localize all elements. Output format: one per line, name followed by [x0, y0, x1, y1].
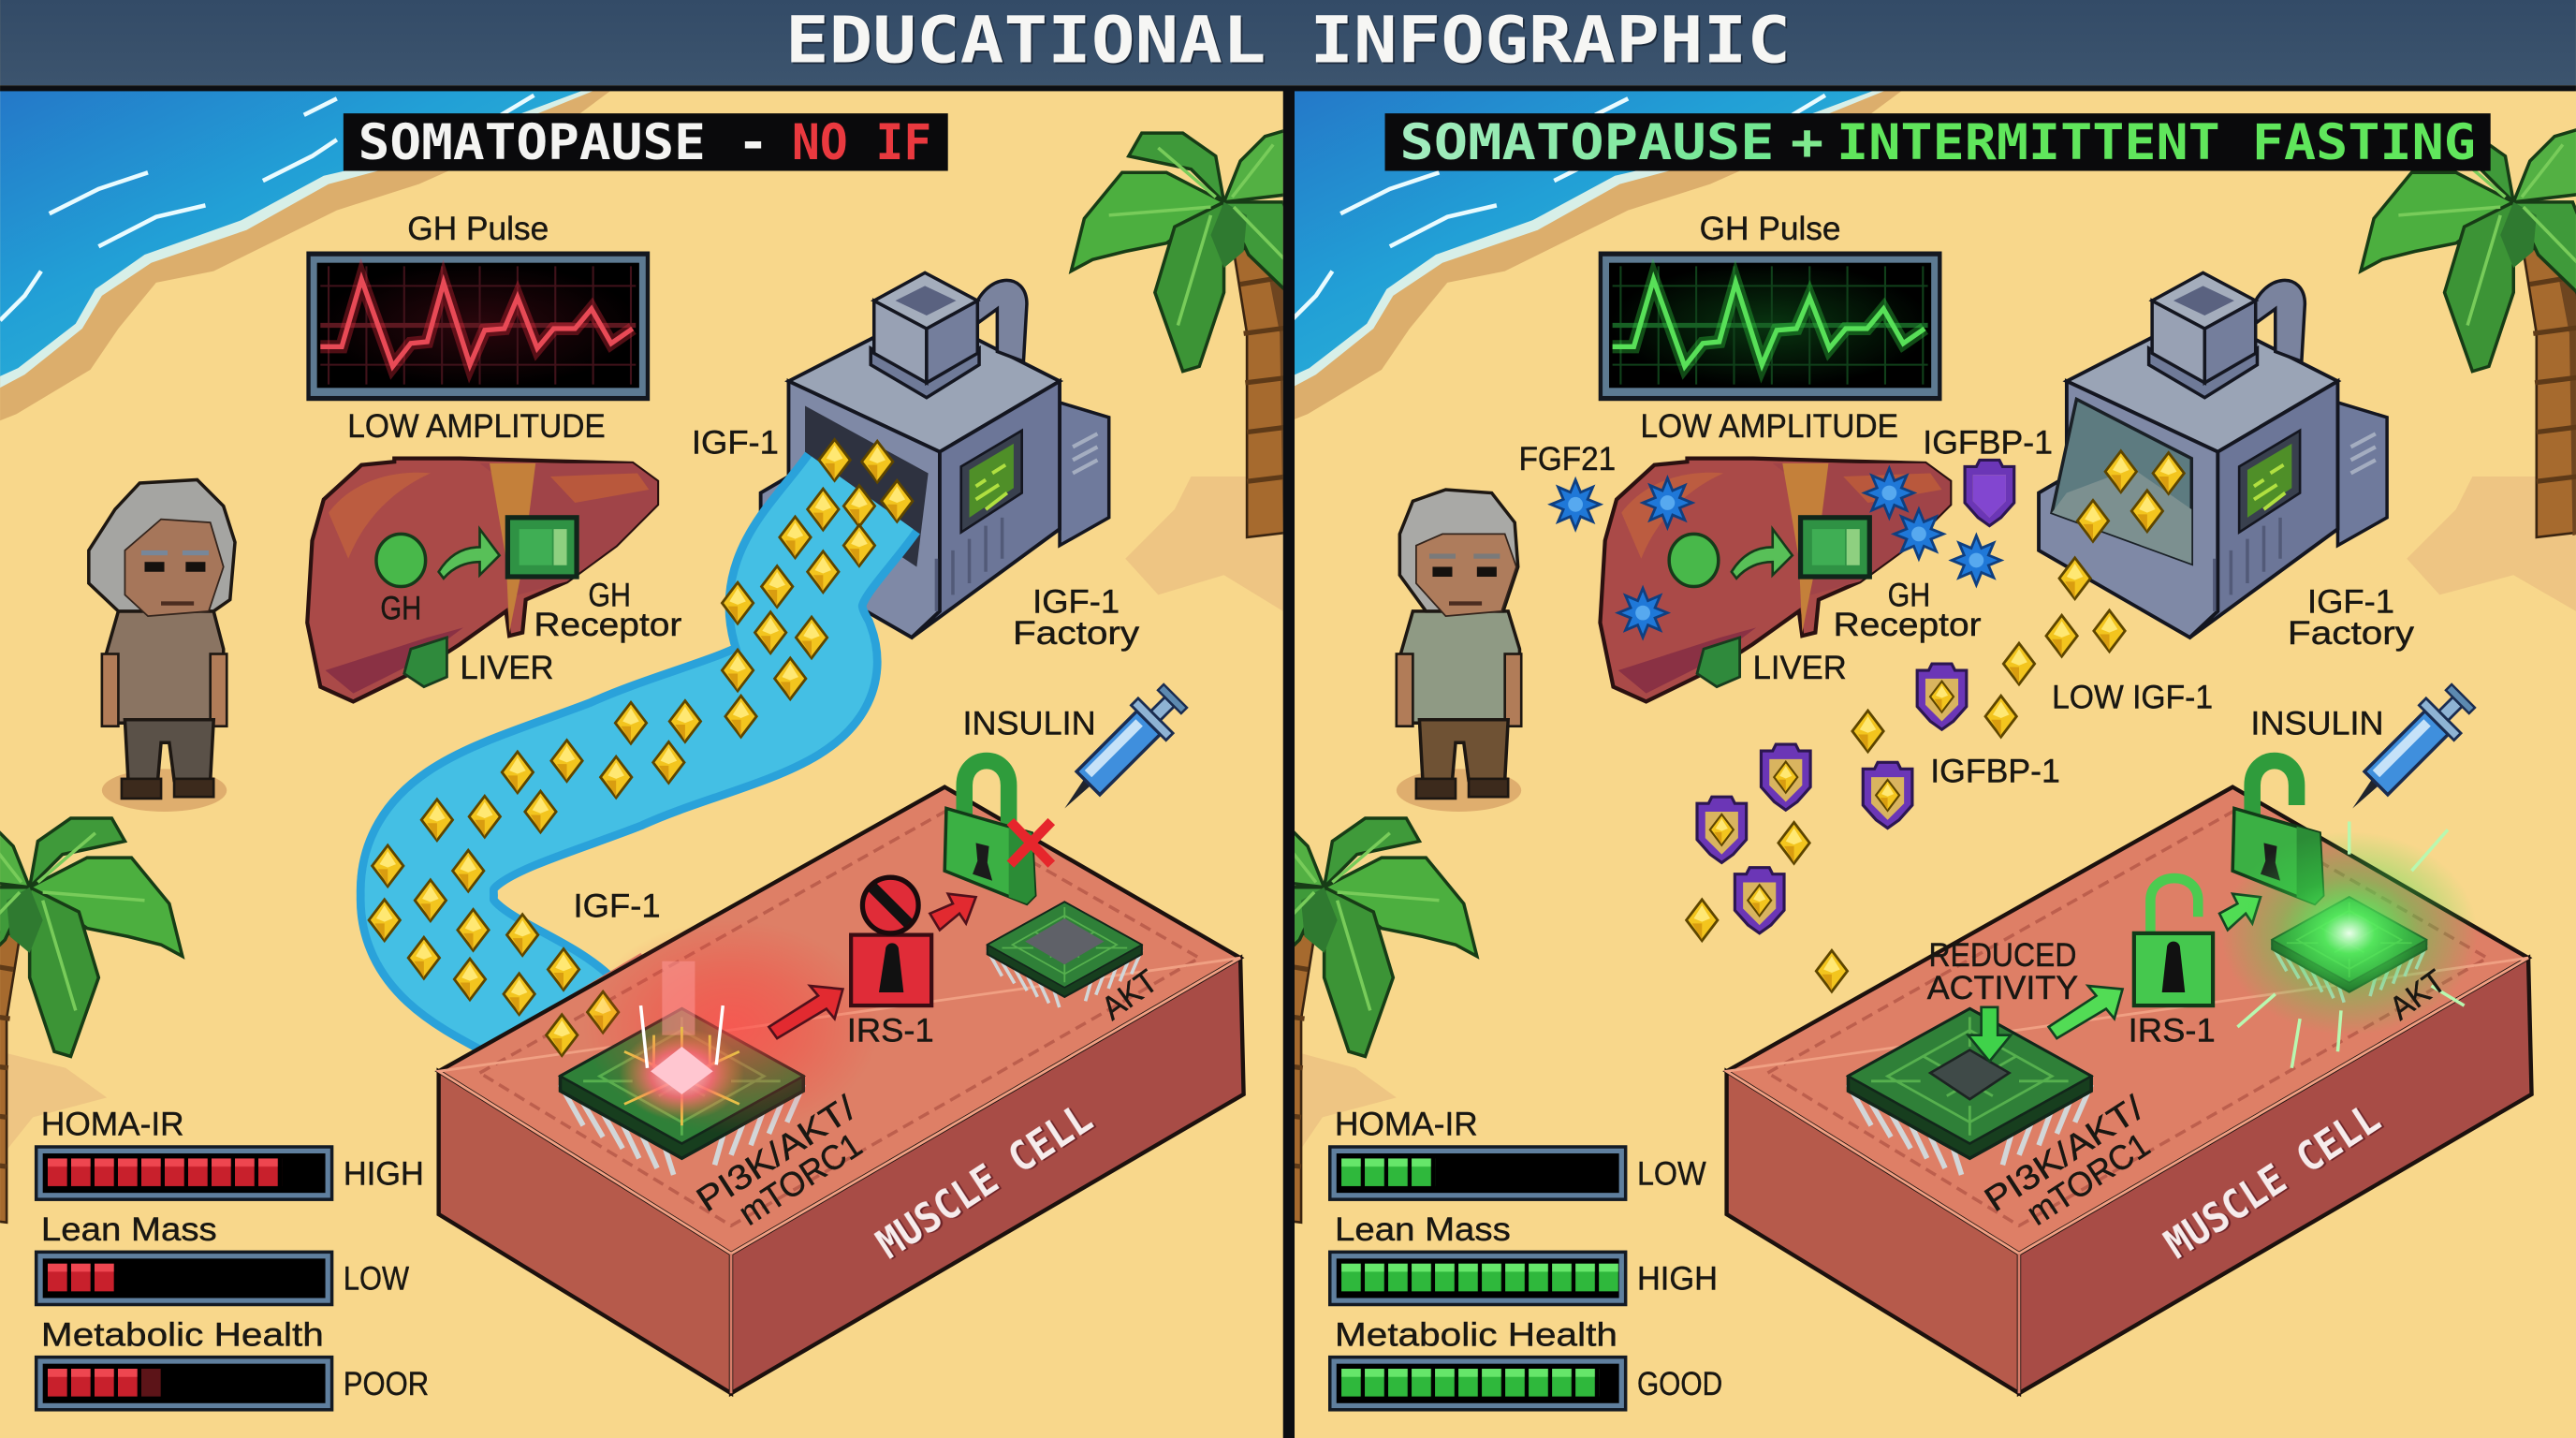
icon: open IRS-1 lock [2134, 878, 2213, 1005]
metric: HOMA-IR low: LOW [1637, 1155, 1706, 1192]
label: IGF-1 at factory: IGF-1 [692, 424, 779, 461]
arrow: reduced activity down [1969, 1007, 2011, 1062]
metric: Lean Mass low: LOW [344, 1261, 409, 1298]
IGF-1 diamonds inside factory [2077, 451, 2184, 541]
metric: Metabolic Health good: Metabolic Health [1335, 1316, 1617, 1353]
icon: IGF-1 factory [761, 272, 1109, 638]
person: older man [1397, 490, 1521, 812]
metric: HOMA-IR low [1328, 1107, 1706, 1201]
icon: blocked IRS-1 lock [851, 877, 931, 1005]
label: GH Receptor: Receptor [1834, 607, 1982, 643]
sparse IGF-1 particles [1687, 558, 2125, 991]
panel: Somatopause with intermittent fasting [1245, 91, 2576, 1412]
icon: liver [307, 459, 657, 701]
panel title: INTERMITTENT FASTING [1837, 114, 2476, 171]
label: Insulin: INSULIN [2250, 705, 2384, 741]
beach ocean [1292, 91, 1902, 420]
label: IRS-1: IRS-1 [847, 1013, 934, 1049]
metric: HOMA-IR high [35, 1107, 424, 1201]
label: IGF-1 Factory [2288, 584, 2415, 652]
label: Low amplitude: LOW AMPLITUDE [1640, 408, 1898, 445]
label: Reduced Activity: REDUCED [1928, 937, 2076, 974]
label: PI3K/AKT/mTORC1: mTORC1 [732, 1125, 869, 1233]
panel title: + [1791, 114, 1823, 171]
metric: Lean Mass low [35, 1211, 409, 1306]
label: IGFBP-1 bound: IGFBP-1 [1930, 753, 2060, 789]
label: IGF-1 Factory: Factory [1013, 615, 1140, 652]
icon: palm tree top right [2361, 128, 2576, 537]
metric: Metabolic Health poor: Metabolic Health [41, 1316, 324, 1353]
panel title [344, 113, 948, 171]
arrow: IRS-1 to lock [2219, 894, 2261, 930]
panel: Somatopause without intermittent fasting [0, 91, 1303, 1412]
AKT chip [988, 902, 1142, 1007]
icon: palm tree bottom left [1245, 814, 1477, 1223]
IGFBP-1 bound particles [1697, 664, 1967, 933]
metric: Metabolic Health poor: POOR [344, 1366, 429, 1402]
label: IGFBP-1: IGFBP-1 [1923, 424, 2053, 461]
metric: Metabolic Health poor [35, 1316, 429, 1412]
label: GH Pulse: GH Pulse [1700, 211, 1841, 247]
label: GH Receptor: GH [588, 578, 631, 614]
label: Liver: LIVER [1753, 650, 1847, 686]
arrow: IRS-1 to lock [929, 894, 976, 930]
panel title: SOMATOPAUSE - [359, 114, 768, 171]
icon: GH receptor [1801, 518, 1869, 577]
beach ocean [0, 91, 611, 420]
arrow: GH to receptor [439, 529, 500, 579]
icon: insulin syringe [1064, 679, 1193, 808]
metric: Lean Mass low: Lean Mass [41, 1211, 217, 1248]
label: AKT: AKT [2383, 962, 2452, 1027]
header band [0, 0, 2576, 91]
label: PI3K/AKT/mTORC1: PI3K/AKT/ [690, 1088, 863, 1219]
metric: Lean Mass high: Lean Mass [1335, 1211, 1511, 1248]
label: GH Receptor: Receptor [534, 607, 682, 643]
title: EDUCATIONAL INFOGRAPHIC [785, 4, 1791, 79]
label: FGF21: FGF21 [1519, 441, 1616, 477]
palm shadow [1125, 477, 1283, 611]
panel title [1385, 113, 2491, 171]
label: IRS-1: IRS-1 [2129, 1013, 2216, 1049]
metrics: health bars [1328, 1107, 1722, 1412]
label: PI3K/AKT/mTORC1 [1978, 1088, 2170, 1248]
metric: HOMA-IR high: HOMA-IR [41, 1107, 184, 1143]
PI3K/AKT/mTORC1 overactive chip [561, 920, 879, 1175]
center divider [1283, 91, 1295, 1438]
icon: GH molecule [1669, 534, 1719, 587]
metric: HOMA-IR high: HIGH [344, 1155, 424, 1192]
metrics: health bars [35, 1107, 429, 1412]
IGF-1 particles [369, 439, 913, 1056]
label: IGF-1 Factory: IGF-1 [1032, 584, 1120, 621]
FGF21 particles [1551, 468, 2001, 638]
label: IGF-1 Factory: IGF-1 [2307, 584, 2394, 621]
label: Muscle Cell: MUSCLE CELL [869, 1094, 1101, 1269]
icon: IGF-1 factory reduced [2039, 272, 2387, 638]
PI3K/AKT/mTORC1 reduced chip [1848, 1009, 2091, 1175]
AKT core [1025, 918, 1104, 964]
metric: Metabolic Health good: GOOD [1637, 1366, 1722, 1402]
label: GH: GH [380, 591, 421, 627]
label: PI3K/AKT/mTORC1: PI3K/AKT/ [1978, 1088, 2151, 1219]
label: Low IGF-1: LOW IGF-1 [2052, 679, 2213, 715]
chart: GH pulse monitor [1599, 252, 1942, 401]
icon: green insulin receptor lock [944, 761, 1035, 903]
label: Reduced Activity: ACTIVITY [1927, 970, 2078, 1006]
label: AKT: AKT [1095, 962, 1164, 1027]
icon: palm tree top right [1071, 128, 1303, 537]
icon: liver [1600, 459, 1950, 701]
panel title: NO IF [792, 114, 931, 171]
icon: IGFBP-1 shield [1965, 460, 2014, 526]
muscle cell block [439, 787, 1244, 1393]
icon: red X blocked [1010, 822, 1051, 864]
label: IGF-1 Factory: Factory [2288, 615, 2415, 652]
person: older woman [89, 479, 235, 812]
label: IGF-1 near river: IGF-1 [574, 888, 661, 924]
panel title: SOMATOPAUSE [1399, 114, 1774, 171]
active AKT chip [2221, 822, 2478, 1068]
label: PI3K/AKT/mTORC1: mTORC1 [2020, 1125, 2157, 1233]
label: Liver: LIVER [460, 650, 554, 686]
label: IGF-1 Factory [1016, 590, 1140, 652]
IGF-1 river [427, 493, 862, 1117]
label: GH Pulse: GH Pulse [407, 211, 549, 247]
icon: GH molecule [376, 534, 426, 587]
label: GH Receptor [1834, 578, 1982, 643]
metric: HOMA-IR low: HOMA-IR [1335, 1107, 1478, 1143]
label: GH Receptor: GH [1888, 578, 1930, 614]
metric: Lean Mass high: HIGH [1637, 1261, 1718, 1298]
label: Muscle Cell: MUSCLE CELL [2157, 1094, 2389, 1269]
label: Insulin: INSULIN [963, 705, 1096, 741]
label: Reduced Activity [1927, 937, 2078, 1006]
arrow: chip to IRS-1 [2049, 986, 2123, 1038]
label: GH Receptor [536, 582, 681, 643]
icon: GH receptor [507, 518, 577, 577]
muscle cell block [1727, 787, 2532, 1393]
chart: GH pulse monitor [306, 252, 650, 401]
icon: open insulin receptor lock [2232, 761, 2323, 903]
icon: insulin syringe [2352, 679, 2481, 808]
icon: palm tree bottom left [0, 814, 183, 1223]
metric: Lean Mass high [1328, 1211, 1718, 1306]
metric: Metabolic Health good [1328, 1316, 1722, 1412]
label: Low amplitude: LOW AMPLITUDE [347, 408, 606, 445]
arrow: chip to IRS-1 [768, 986, 842, 1038]
arrow: GH to receptor [1732, 529, 1793, 579]
palm shadow [2407, 477, 2576, 611]
